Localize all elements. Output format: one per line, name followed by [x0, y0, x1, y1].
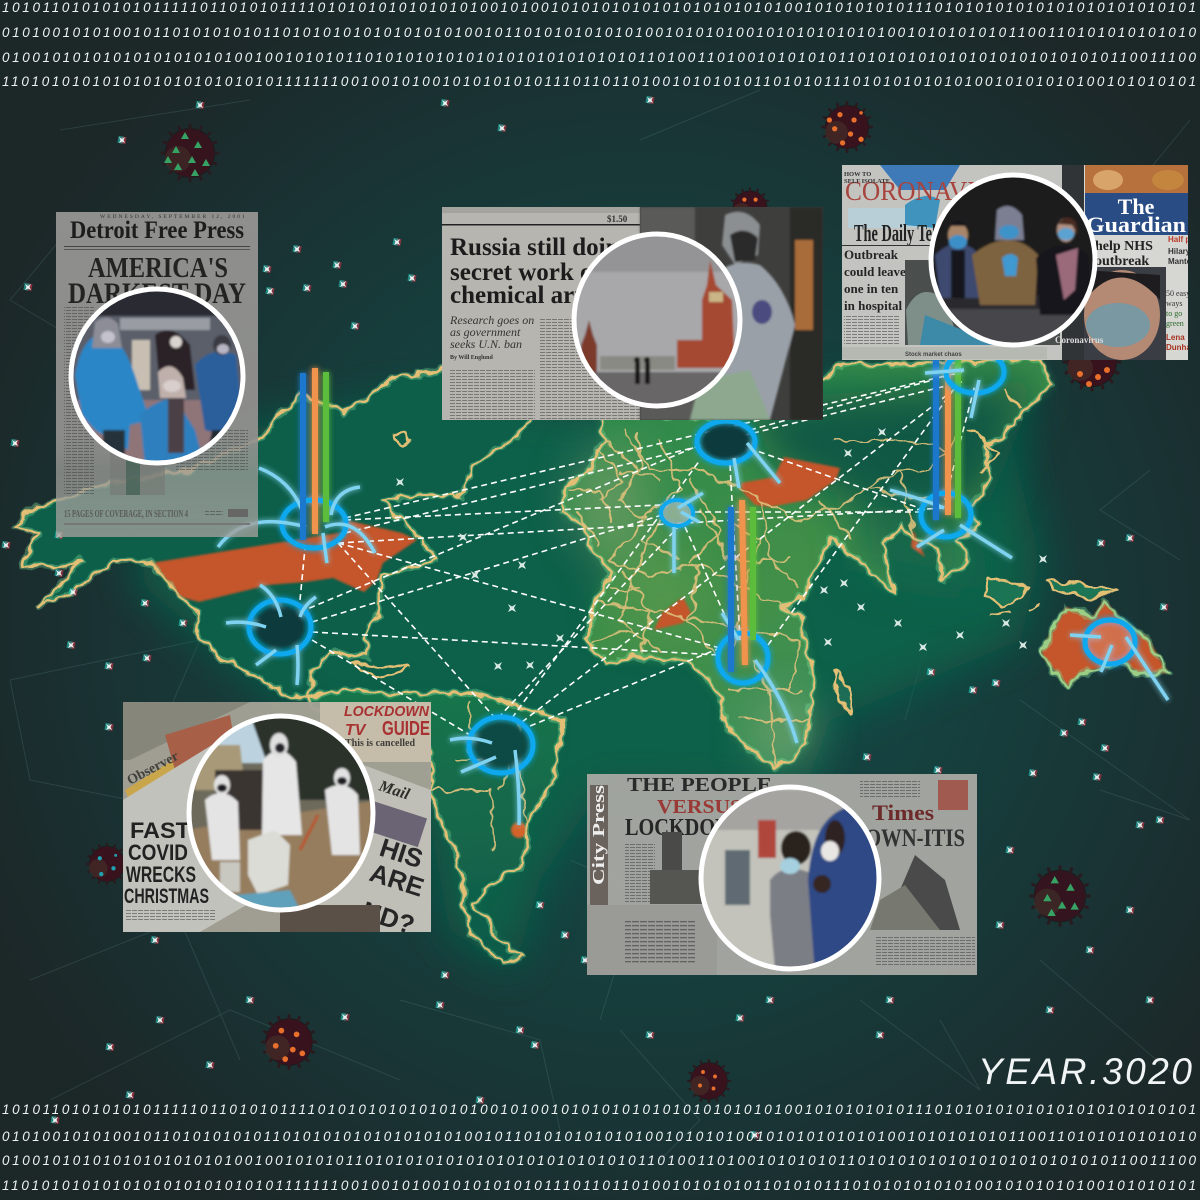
photo: family in blue raincoats	[68, 288, 248, 470]
panel: newspaper collage coronavirus with photo: The	[1118, 194, 1155, 219]
panel: newspaper collage coronavirus with photo: Guardian	[1086, 212, 1186, 237]
panel: newspaper people versus lockdown with photo: DOWN-ITIS	[850, 825, 965, 852]
panel: newspaper collage christmas with photo: Mail	[376, 777, 412, 804]
green ocean glow	[130, 400, 1040, 970]
hub: central america	[226, 585, 316, 685]
panel: newspaper collage coronavirus with photo: Coronavirus	[1055, 335, 1104, 345]
panel: newspaper collage coronavirus with photo: Hilary	[1168, 247, 1191, 256]
panel: newspaper collage christmas with photo: TV	[345, 722, 367, 739]
panel: newspaper detroit free press with photo: Detroit Free Press	[70, 217, 244, 244]
panel: newspaper russia chemical arms with photo	[442, 207, 823, 420]
panel: newspaper detroit free press with photo: 15 PAGES OF COVERAGE, IN SECTION 4	[64, 508, 188, 520]
panel: newspaper collage christmas with photo: This is cancelled	[345, 738, 415, 749]
binary text: bottom: 01001010101010101010101001001010101101010101010101010101010101011010011010010101010110101010101010101010101010110011100	[2, 1153, 1196, 1168]
panel: newspaper russia chemical arms with photo: seeks U.N. ban	[450, 337, 522, 351]
hub: russia	[697, 421, 780, 488]
hub: far east	[925, 351, 1004, 418]
hub: south america	[450, 717, 533, 825]
hub: africa	[718, 500, 797, 743]
panel: newspaper people versus lockdown with photo: Times	[872, 800, 934, 825]
panel: newspaper collage coronavirus with photo: 50 easy	[1166, 289, 1190, 298]
binary text: top: 10101101010101011111011010101111010101010101010100101001010101010101010101010100101010101011101010101010101010101010101	[2, 0, 1196, 15]
map: land masses	[15, 360, 1116, 962]
panel: newspaper collage coronavirus with photo: could leave	[844, 264, 906, 279]
virus: top centre	[822, 102, 872, 152]
binary text: top: 11010101010101010101010101011111110010010100101010101011101101101001010101011010101110101010101010010101010100101010101	[2, 74, 1196, 89]
hub: europe	[660, 493, 703, 573]
panel: newspaper collage coronavirus with photo: in hospital	[844, 298, 903, 313]
virus: top left	[162, 125, 218, 181]
virus: bottom left	[262, 1015, 316, 1069]
panel: newspaper collage christmas with photo: FAST	[130, 818, 191, 843]
panel: newspaper collage christmas with photo	[123, 702, 431, 940]
panel: newspaper people versus lockdown with photo: THE PEOPLE	[627, 774, 772, 796]
panel: newspaper collage christmas with photo: LOCKDOWN	[344, 703, 430, 720]
map: coastlines and borders	[15, 360, 1168, 962]
panel: newspaper collage coronavirus with photo: Dunham	[1166, 343, 1198, 352]
panel: newspaper detroit free press with photo	[56, 212, 258, 537]
binary text: top	[2, 0, 1196, 89]
panel: newspaper russia chemical arms with photo: Russia still doing	[450, 234, 633, 261]
panel: newspaper russia chemical arms with photo: chemical arms	[450, 282, 605, 309]
panel: newspaper people versus lockdown with photo	[587, 774, 977, 975]
virus: right under guardian	[1064, 334, 1120, 390]
panel: newspaper people versus lockdown with photo: VERSUS	[657, 796, 742, 818]
binary text: bottom	[2, 1102, 1196, 1193]
panel: newspaper collage christmas with photo: HIS	[376, 832, 427, 874]
connection network dashed lines	[300, 372, 975, 738]
panel: newspaper collage coronavirus with photo: one in ten	[844, 281, 899, 296]
photo: burial workers in white suits	[185, 713, 380, 915]
panel: newspaper collage coronavirus with photo: Outbreak	[844, 247, 899, 262]
panel: newspaper collage christmas with photo: GUIDE	[382, 718, 430, 740]
panel: newspaper collage coronavirus with photo: HOW TO	[844, 171, 871, 178]
panel: newspaper collage coronavirus with photo: green	[1166, 319, 1184, 328]
photo: men with masks	[697, 784, 887, 975]
virus: left	[87, 844, 127, 884]
title: year 3020: YEAR.3020	[978, 1051, 1192, 1092]
panel: newspaper russia chemical arms with photo: as government	[450, 325, 521, 339]
binary text: bottom: 10101101010101011111011010101111010101010101010100101001010101010101010101010100101010101011101010101010101010101010101	[2, 1102, 1196, 1117]
panel: newspaper russia chemical arms with photo: By Will Englund	[450, 355, 493, 361]
panel: newspaper collage christmas with photo: COVID	[128, 840, 188, 865]
panel: newspaper collage coronavirus with photo: Mantel	[1168, 257, 1193, 266]
panel: newspaper collage coronavirus with photo: SELF ISOLATE	[844, 178, 890, 185]
map: highlighted countries	[151, 457, 1168, 838]
panel: newspaper collage coronavirus with photo: help NHS	[1095, 239, 1153, 254]
virus: bottom right	[1031, 867, 1089, 925]
photo: three people in masks	[928, 172, 1100, 350]
virus: behind russia panel	[730, 188, 770, 228]
panel: newspaper collage coronavirus with photo	[842, 165, 1200, 360]
panel: newspaper collage coronavirus with photo: CORONAVIRUS	[845, 176, 1025, 206]
hub: east asia	[890, 360, 1012, 558]
panel: newspaper russia chemical arms with photo: $1.50	[607, 214, 628, 224]
panel: newspaper collage coronavirus with photo: The Daily Telegraph	[854, 221, 979, 247]
hub: australia	[1070, 620, 1168, 700]
panel: newspaper detroit free press with photo: DARKEST DAY	[68, 277, 246, 310]
panel: newspaper collage christmas with photo: CHRISTMAS	[124, 885, 209, 908]
panel: newspaper collage coronavirus with photo: Stock market chaos	[905, 352, 962, 358]
panel: newspaper collage coronavirus with photo: to go	[1166, 309, 1182, 318]
panel: newspaper detroit free press with photo: AMERICA'S	[88, 252, 228, 284]
panel: newspaper people versus lockdown with photo: City Press	[589, 784, 608, 885]
panel: newspaper collage christmas with photo: WRECKS	[126, 862, 196, 887]
virus: bottom centre	[688, 1060, 730, 1102]
panel: newspaper collage coronavirus with photo: outbreak	[1095, 254, 1149, 269]
panel: newspaper collage christmas with photo: Observer	[125, 749, 181, 789]
land shading	[570, 380, 1040, 760]
panel: newspaper people versus lockdown with photo: LOCKDOWN	[625, 815, 751, 841]
panel: newspaper collage coronavirus with photo: Lena	[1166, 333, 1185, 342]
binary text: top: 01001010101010101010101001001010101101010101010101010101010101011010011010010101010110101010101010101010101010110011100	[2, 50, 1196, 65]
panel: newspaper collage christmas with photo: ND?	[358, 895, 418, 940]
binary text: bottom: 11010101010101010101010101011111110010010100101010101011101101101001010101011010101110101010101010010101010100101010101	[2, 1178, 1196, 1193]
panel: newspaper collage christmas with photo: ARE	[366, 857, 428, 903]
photo: red square moscow	[570, 232, 745, 410]
binary text: top: 01010010101001011010101010110101010101010101010010110101010101010010101010010101010101010010101010101100110101010101010	[2, 25, 1196, 40]
panel: newspaper russia chemical arms with photo: Research goes on	[449, 313, 534, 327]
binary text: bottom: 01010010101001011010101010110101010101010101010010110101010101010010101010010101010101010010101010101100110101010101010	[2, 1129, 1196, 1144]
hub: north america	[218, 368, 375, 563]
panel: newspaper collage coronavirus with photo: ways	[1166, 299, 1182, 308]
panel: newspaper detroit free press with photo: WEDNESDAY, SEPTEMBER 12, 2001	[100, 214, 247, 220]
panel: newspaper russia chemical arms with photo: secret work on	[450, 259, 607, 286]
